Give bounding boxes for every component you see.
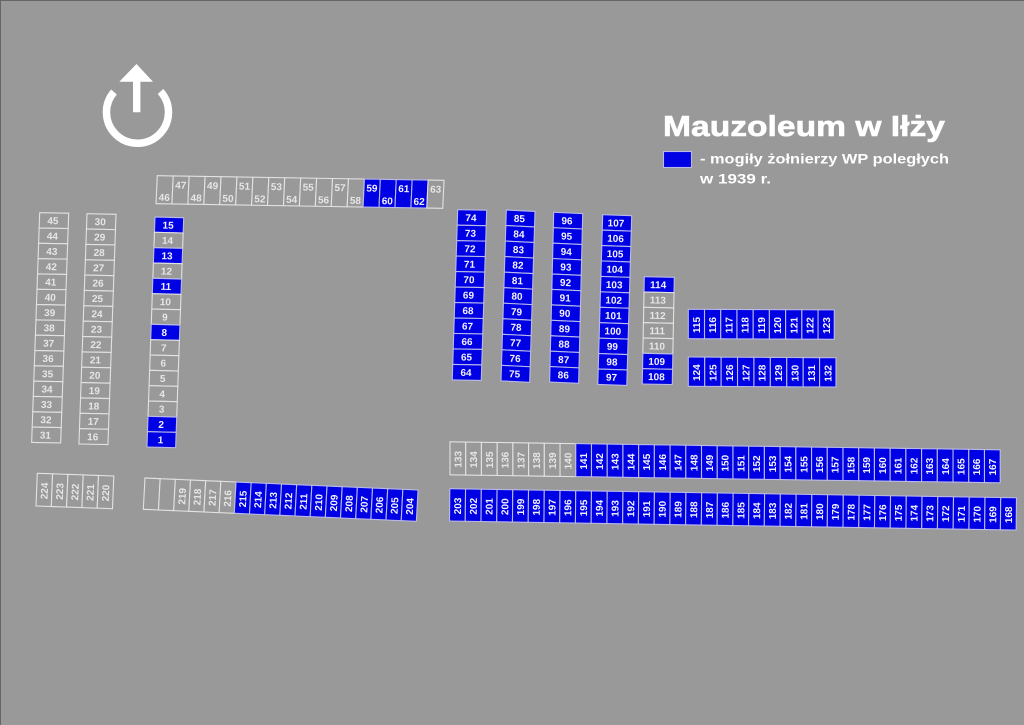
row: graves 46-63: 55 [302, 183, 314, 194]
row: graves 124-132: 125 [709, 364, 720, 381]
row: graves 46-63: 54 [286, 195, 298, 206]
row: graves 203-168: 170 [972, 505, 984, 523]
row: graves 203-168: 177 [862, 504, 873, 521]
column: graves 107-97: 104 [606, 264, 624, 276]
column: graves 96-86: 92 [560, 278, 572, 289]
column: graves 30-16: 19 [89, 386, 100, 397]
legend text: - mogiły żołnierzy WP poległych [700, 150, 949, 166]
row: graves 133-167: 153 [768, 455, 779, 472]
row: graves 219-204 with two unnumbered plots: 210 [314, 493, 326, 511]
column: graves 15-1: 15 [162, 220, 174, 232]
row: graves 124-132: 132 [823, 365, 834, 382]
row: graves 133-167: 135 [485, 451, 496, 468]
column: graves 96-86: 87 [558, 355, 570, 366]
legend swatch [664, 152, 692, 168]
row: graves 133-167: 164 [941, 458, 952, 475]
column: graves 45-31: 44 [47, 231, 59, 243]
legend [664, 150, 949, 168]
row: graves 219-204 with two unnumbered plots: 209 [329, 494, 341, 512]
row: graves 224-220: 220 [101, 484, 112, 502]
column: graves 114-108: 111 [649, 326, 666, 337]
icon: north arrow [106, 64, 168, 143]
row: graves 46-63: 50 [222, 194, 234, 205]
row: graves 133-167: 148 [689, 454, 700, 471]
column: graves 74-64: 66 [461, 337, 473, 348]
row: graves 124-132: 129 [774, 364, 785, 381]
row: graves 124-132: 127 [741, 364, 752, 381]
row: graves 133-167: 155 [799, 456, 810, 473]
row: graves 203-168: 196 [563, 499, 574, 516]
row: graves 46-63: 51 [239, 182, 251, 193]
row: graves 219-204 with two unnumbered plots: 211 [299, 493, 310, 510]
column: graves 30-16: 25 [92, 294, 104, 305]
row: graves 46-63: 60 [381, 196, 393, 207]
row: graves 203-168: 195 [579, 499, 590, 516]
column: graves 107-97: 106 [607, 234, 624, 245]
column: graves 30-16: 26 [92, 279, 104, 290]
row: graves 203-168: 178 [847, 503, 858, 521]
column: graves 74-64: 71 [464, 260, 476, 271]
column: graves 96-86: 89 [559, 324, 571, 336]
row: graves 133-167: 167 [988, 458, 999, 476]
column: graves 107-97: 105 [607, 249, 624, 261]
row: graves 46-63: 56 [318, 195, 330, 206]
row: graves 133-167: 152 [752, 455, 763, 472]
column: graves 114-108: 108 [648, 372, 665, 383]
column: graves 114-108: 112 [649, 311, 666, 322]
column: graves 74-64: 70 [463, 275, 475, 286]
row: graves 224-220: 223 [55, 483, 67, 500]
column: graves 30-16: 17 [87, 417, 99, 428]
column: graves 85-75: 85 [514, 214, 526, 225]
column: graves 96-86 [550, 212, 583, 383]
column: graves 74-64 [452, 210, 487, 380]
column: graves 85-75: 84 [513, 229, 525, 241]
row: graves 203-168: 183 [768, 502, 779, 519]
row: graves 115-123: 120 [773, 317, 784, 334]
column: graves 74-64: 67 [462, 321, 474, 333]
row: graves 133-167: 142 [595, 453, 606, 470]
row: graves 115-123: 122 [806, 317, 817, 334]
column: graves 85-75: 77 [510, 338, 522, 350]
row: graves 133-167: 140 [564, 452, 574, 469]
row: graves 133-167: 146 [658, 454, 669, 471]
column: graves 74-64: 73 [465, 229, 477, 240]
row: graves 133-167: 156 [815, 456, 826, 473]
row: graves 133-167: 143 [611, 453, 622, 470]
row: graves 124-132: 131 [807, 364, 818, 382]
row: graves 133-167: 147 [674, 454, 685, 471]
column: graves 85-75 [501, 210, 535, 382]
column: graves 30-16: 22 [90, 340, 102, 351]
column: graves 30-16: 16 [87, 432, 99, 443]
column: graves 107-97: 99 [607, 342, 619, 353]
column: graves 30-16: 24 [91, 309, 103, 320]
column: graves 96-86: 96 [561, 216, 573, 227]
column: graves 30-16: 29 [94, 232, 106, 244]
row: graves 46-63: 59 [366, 184, 378, 195]
row: graves 203-168: 179 [831, 503, 842, 520]
column: graves 45-31: 37 [43, 339, 55, 350]
column: graves 45-31: 40 [44, 293, 56, 304]
row: graves 124-132: 126 [725, 364, 736, 381]
column: graves 107-97: 101 [605, 311, 622, 322]
row: graves 203-168: 203 [453, 497, 464, 514]
column: graves 45-31: 43 [46, 247, 58, 258]
row: graves 224-220: 221 [85, 484, 97, 501]
row: graves 133-167: 137 [516, 451, 527, 469]
row: graves 203-168 [450, 489, 1016, 530]
row: graves 46-63: 58 [350, 196, 362, 207]
row: graves 115-123: 116 [708, 317, 719, 333]
row: graves 133-167: 160 [878, 457, 889, 474]
row: graves 115-123: 119 [757, 317, 768, 333]
column: graves 45-31: 36 [42, 354, 54, 365]
row: graves 203-168: 191 [642, 500, 653, 517]
column: graves 107-97: 103 [606, 280, 623, 291]
legend text line 2: w 1939 r. [699, 170, 771, 186]
row: graves 133-167: 141 [579, 452, 590, 470]
row: graves 46-63 [156, 176, 444, 208]
row: graves 46-63: 48 [190, 193, 202, 204]
row: graves 219-204 with two unnumbered plots: 204 [405, 497, 417, 515]
row: graves 219-204 with two unnumbered plots: 207 [359, 495, 371, 513]
column: graves 15-1: 8 [161, 328, 168, 339]
column: graves 15-1: 3 [159, 405, 165, 416]
column: graves 45-31: 33 [41, 400, 53, 411]
column: graves 114-108: 109 [648, 357, 666, 368]
column: graves 45-31: 35 [42, 369, 54, 380]
row: graves 203-168: 188 [689, 501, 700, 518]
row: graves 115-123: 115 [692, 317, 703, 333]
column: graves 15-1: 10 [160, 297, 172, 308]
row: graves 133-167: 165 [957, 458, 967, 475]
row: graves 219-204 with two unnumbered plots: 217 [208, 489, 219, 506]
column: graves 114-108: 110 [649, 341, 666, 353]
row: graves 203-168: 184 [752, 502, 763, 519]
column: graves 74-64: 72 [464, 244, 476, 255]
column: graves 85-75: 75 [509, 369, 521, 381]
row: graves 203-168: 182 [784, 502, 795, 520]
column: graves 15-1: 9 [162, 313, 168, 324]
row: graves 133-167: 162 [909, 457, 920, 474]
row: graves 219-204 with two unnumbered plots: 215 [238, 490, 250, 508]
row: graves 203-168: 180 [815, 503, 826, 520]
column: graves 15-1: 4 [159, 389, 166, 400]
column: graves 85-75: 82 [512, 260, 524, 272]
column: graves 45-31: 39 [44, 308, 56, 319]
row: graves 203-168: 192 [626, 500, 637, 517]
column: graves 96-86: 88 [558, 339, 570, 351]
row: graves 219-204 with two unnumbered plots: 218 [192, 488, 204, 506]
column: graves 30-16: 23 [91, 325, 103, 336]
row: graves 203-168: 173 [925, 505, 936, 522]
column: graves 114-108 [642, 277, 674, 385]
column: graves 45-31 [32, 213, 69, 443]
row: graves 203-168: 198 [532, 498, 543, 516]
row: graves 46-63: 62 [413, 197, 425, 208]
row: graves 203-168: 174 [909, 504, 921, 522]
row: graves 203-168: 189 [673, 501, 685, 518]
row: graves 203-168: 197 [547, 499, 559, 516]
column: graves 30-16 [79, 214, 116, 445]
column: graves 96-86: 95 [561, 231, 573, 243]
row: graves 203-168: 169 [988, 506, 999, 523]
column: graves 30-16: 20 [89, 371, 101, 382]
row: graves 133-167: 157 [831, 456, 842, 473]
row: graves 219-204 with two unnumbered plots: 216 [223, 489, 235, 507]
row: graves 133-167: 134 [469, 451, 480, 468]
row: graves 115-123: 121 [789, 317, 800, 334]
row: graves 203-168: 175 [894, 504, 905, 521]
row: graves 46-63: 53 [271, 182, 283, 193]
column: graves 45-31: 42 [46, 262, 57, 273]
column: graves 30-16: 21 [90, 355, 102, 367]
row: graves 133-167: 138 [532, 452, 543, 469]
row: graves 203-168: 181 [799, 503, 810, 520]
column: graves 85-75: 76 [509, 354, 521, 365]
column: graves 85-75: 79 [511, 307, 523, 319]
row: graves 203-168: 185 [736, 502, 748, 519]
column: graves 96-86: 94 [561, 247, 572, 258]
row: graves 219-204 with two unnumbered plots: 213 [268, 491, 280, 509]
row: graves 115-123: 123 [822, 317, 833, 334]
row: graves 133-167: 166 [972, 458, 983, 475]
column: graves 15-1: 7 [161, 343, 167, 354]
column: graves 15-1: 2 [158, 420, 164, 431]
column: graves 15-1 [147, 217, 184, 448]
row: graves 133-167: 149 [705, 454, 716, 472]
column: graves 107-97: 107 [607, 218, 625, 230]
column: graves 45-31: 32 [40, 415, 52, 426]
row: graves 124-132 [688, 357, 836, 387]
column: graves 114-108: 113 [650, 295, 666, 307]
row: graves 203-168: 172 [941, 505, 952, 522]
title: Mauzoleum w Iłży [663, 111, 945, 143]
row: graves 46-63: 63 [430, 185, 442, 196]
row: graves 46-63: 47 [175, 180, 187, 192]
column: graves 96-86: 90 [559, 309, 571, 320]
row: graves 133-167: 145 [642, 453, 653, 471]
column: graves 15-1: 5 [160, 374, 166, 385]
row: graves 115-123: 117 [724, 317, 735, 333]
row: graves 133-167: 133 [453, 451, 464, 468]
row: graves 133-167: 154 [784, 455, 795, 473]
column: graves 85-75: 81 [512, 276, 524, 287]
column: graves 45-31: 41 [45, 277, 57, 289]
column: graves 107-97 [598, 215, 632, 385]
row: graves 46-63: 61 [398, 184, 410, 195]
row: graves 219-204 with two unnumbered plots: 208 [344, 495, 356, 512]
row: graves 219-204 with two unnumbered plots: 212 [283, 492, 295, 510]
row: graves 133-167 [450, 442, 1000, 483]
column: graves 45-31: 38 [43, 323, 55, 334]
column: graves 30-16: 18 [88, 401, 100, 413]
column: graves 74-64: 74 [465, 213, 477, 224]
row: graves 203-168: 201 [485, 498, 496, 515]
column: graves 74-64: 68 [462, 306, 474, 317]
row: graves 224-220: 222 [70, 483, 82, 501]
row: graves 203-168: 193 [610, 500, 622, 517]
row: graves 133-167: 163 [925, 457, 936, 475]
row: graves 203-168: 171 [957, 505, 968, 522]
column: graves 74-64: 65 [461, 352, 473, 364]
column: graves 45-31: 45 [47, 216, 59, 227]
column: graves 15-1: 1 [158, 435, 164, 446]
row: graves 203-168: 202 [469, 497, 480, 515]
row: graves 219-204 with two unnumbered plots: 214 [253, 491, 265, 508]
column: graves 30-16: 30 [94, 217, 106, 228]
column: graves 45-31: 34 [41, 385, 53, 396]
row: graves 203-168: 176 [878, 504, 889, 521]
row: graves 46-63: 52 [254, 194, 266, 205]
row: graves 219-204 with two unnumbered plots: 205 [390, 497, 401, 514]
row: graves 133-167: 136 [501, 451, 512, 469]
column: graves 74-64: 69 [463, 291, 475, 302]
row: graves 219-204 with two unnumbered plots: 219 [177, 487, 189, 505]
column: graves 96-86: 93 [560, 262, 572, 274]
row: graves 46-63: 46 [158, 193, 170, 204]
row: graves 124-132: 124 [692, 364, 703, 381]
row: graves 133-167: 159 [862, 456, 873, 474]
column: graves 96-86: 91 [559, 293, 571, 305]
column: graves 15-1: 12 [161, 266, 173, 278]
row: graves 133-167: 161 [894, 457, 905, 474]
row: graves 203-168: 194 [595, 499, 606, 517]
column: graves 74-64: 64 [460, 368, 472, 379]
row: graves 124-132: 130 [791, 364, 802, 382]
row: graves 224-220 [36, 473, 114, 509]
column: graves 114-108: 114 [650, 280, 667, 291]
column: graves 96-86: 86 [558, 370, 569, 382]
row: graves 219-204 with two unnumbered plots: 206 [374, 496, 386, 514]
column: graves 85-75: 80 [511, 291, 523, 303]
row: graves 203-168: 200 [500, 498, 511, 515]
row: graves 224-220: 224 [40, 482, 51, 499]
column: graves 107-97: 102 [605, 295, 623, 307]
row: graves 115-123: 118 [741, 317, 752, 333]
row: graves 115-123 [688, 309, 834, 339]
column: graves 107-97: 98 [606, 357, 618, 369]
row: graves 133-167: 150 [721, 454, 732, 472]
row: graves 203-168: 186 [721, 501, 732, 519]
row: graves 46-63: 57 [334, 183, 346, 194]
column: graves 85-75: 83 [513, 245, 525, 256]
row: graves 203-168: 199 [516, 498, 527, 515]
row: graves 203-168: 190 [658, 500, 669, 518]
row: graves 133-167: 151 [736, 455, 747, 472]
row: graves 133-167: 144 [626, 453, 637, 470]
column: graves 107-97: 97 [606, 373, 618, 384]
column: graves 15-1: 6 [160, 359, 167, 370]
column: graves 15-1: 14 [162, 236, 174, 247]
column: graves 15-1: 13 [161, 251, 173, 262]
row: graves 203-168: 168 [1004, 506, 1015, 523]
column: graves 85-75: 78 [510, 323, 522, 334]
column: graves 45-31: 31 [40, 431, 52, 442]
column: graves 30-16: 27 [93, 263, 105, 274]
row: graves 46-63: 49 [207, 181, 219, 192]
row: graves 124-132: 128 [758, 364, 769, 381]
row: graves 203-168: 187 [705, 501, 716, 518]
column: graves 107-97: 100 [604, 326, 622, 338]
column: graves 30-16: 28 [93, 248, 105, 259]
column: graves 15-1: 11 [160, 282, 172, 293]
row: graves 133-167: 158 [846, 456, 857, 474]
row: graves 133-167: 139 [548, 452, 559, 469]
row: graves 219-204 with two unnumbered plots [143, 478, 418, 521]
